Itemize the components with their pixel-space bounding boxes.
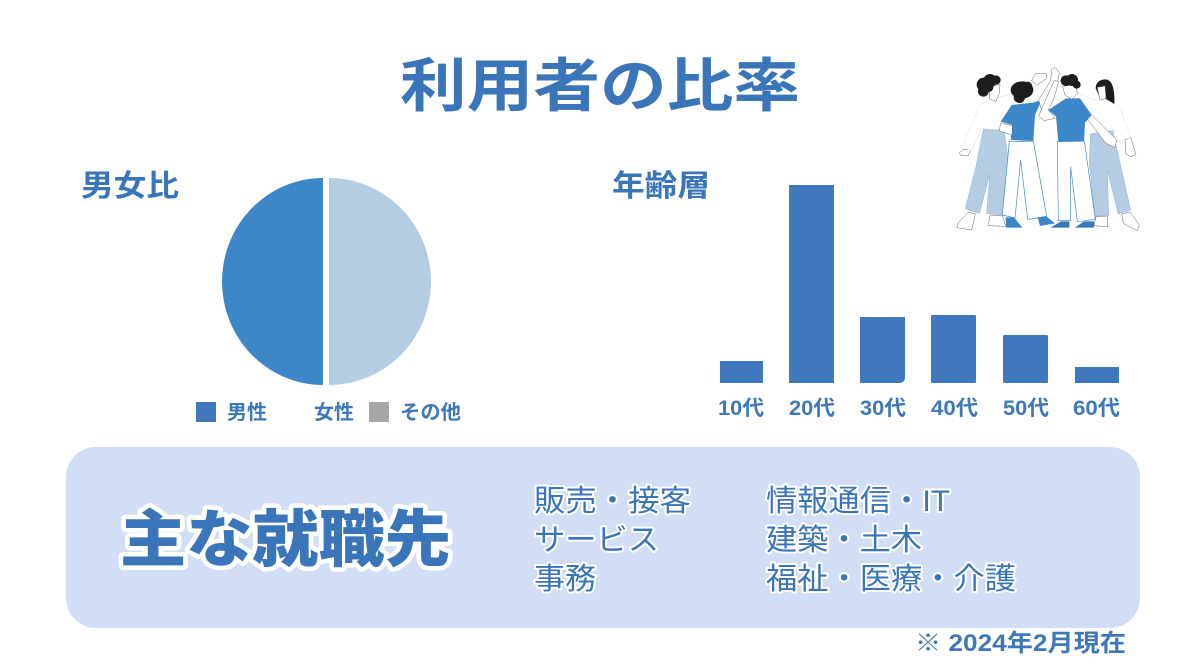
legend: gender ratio: その他 [400, 401, 461, 424]
back right person [1078, 79, 1139, 231]
bar chart: age groups [718, 185, 1120, 420]
legend: gender ratio: 女性 [314, 401, 354, 424]
list: left column: サービス [534, 524, 659, 557]
icon: people high-fiving [957, 67, 1139, 231]
list: right column: 福祉・医療・介護 [766, 563, 1016, 596]
bar chart: age groups: 60代 [1073, 397, 1120, 420]
heading: gender ratio: 男女比 [81, 170, 179, 203]
legend: gender ratio [196, 401, 461, 424]
bar chart: age groups: 30代 [860, 397, 906, 420]
bar chart: age groups: 50代 [1003, 397, 1049, 420]
list: left column [534, 485, 691, 596]
list: right column: 建築・土木 [766, 524, 922, 557]
list: right column [766, 485, 1016, 596]
list: left column: 事務 [534, 563, 596, 596]
back left person [957, 73, 1047, 230]
panel: main employers [66, 447, 1140, 628]
title: 利用者の比率 [400, 54, 800, 119]
panel heading: 主な就職先 [120, 506, 451, 575]
pie chart: gender ratio [222, 178, 431, 385]
list: left column: 販売・接客 [534, 485, 691, 518]
footnote: ※ 2024年2月現在 [915, 630, 1126, 657]
bar chart: age groups: 10代 [718, 397, 764, 420]
front right person [1039, 74, 1117, 228]
front left person [999, 67, 1059, 228]
bar chart: age groups: 40代 [931, 397, 978, 420]
heading: age groups: 年齢層 [612, 170, 710, 203]
bar chart: age groups: 20代 [789, 397, 835, 420]
list: right column: 情報通信・IT [766, 485, 950, 518]
legend: gender ratio: 男性 [227, 401, 267, 424]
